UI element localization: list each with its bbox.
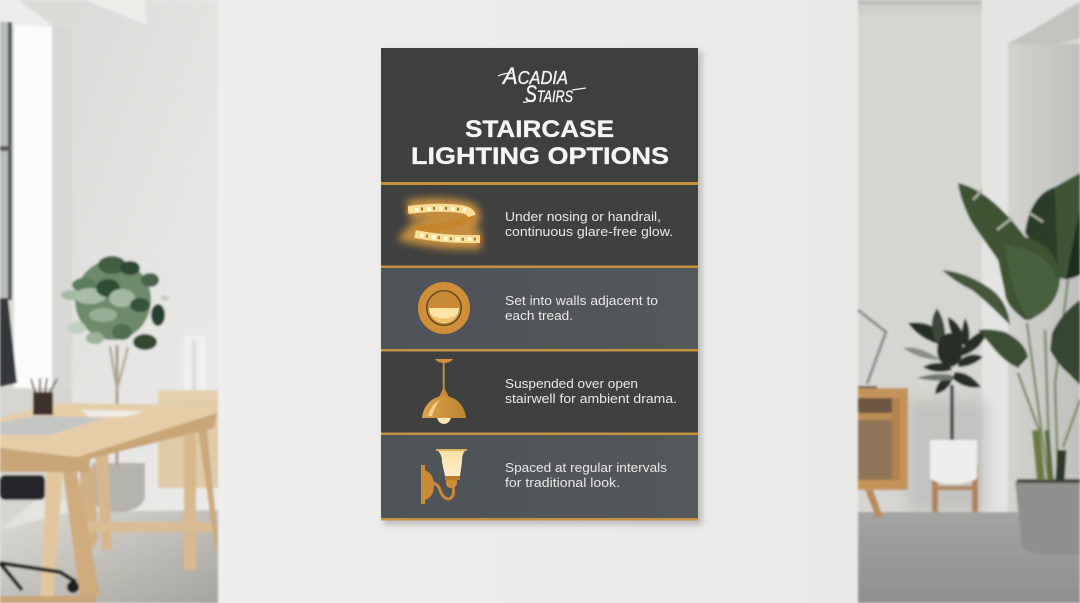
poster panel: [381, 48, 698, 520]
wooden cabinet: [858, 388, 908, 517]
title: LIGHTING OPTIONS: [411, 143, 669, 170]
left office background: [0, 0, 218, 603]
header: logo: STAIRS: [525, 81, 573, 108]
text: recessed description: Set into walls adjacent to: [505, 293, 658, 308]
row 1: LED strip: [381, 185, 698, 266]
table top: [0, 403, 217, 457]
text: sconce description: [505, 460, 668, 490]
monitor: [0, 298, 17, 387]
icon: recessed wall light: [418, 282, 470, 334]
wooden cabinet behind table: [158, 390, 218, 488]
title: STAIRCASE: [465, 116, 614, 143]
text: recessed description: [505, 293, 658, 323]
large plant leaves: [942, 173, 1080, 385]
text: pendant description: [505, 376, 677, 406]
header: logo: ACADIA: [501, 63, 568, 90]
row 3: pendant: [381, 351, 698, 433]
header: logo: [498, 63, 586, 108]
row 4: wall sconce: [381, 435, 698, 518]
left floor plant pot: [92, 463, 145, 512]
text: sconce description: for traditional look.: [505, 475, 620, 490]
text: strip description: [505, 209, 673, 239]
left plant trunk: [116, 345, 118, 465]
center wall: [218, 0, 858, 603]
icon: pendant lamp: [422, 359, 466, 424]
poster shadow: [384, 51, 702, 525]
left plant foliage: [61, 256, 169, 350]
text: pendant description: Suspended over open: [505, 376, 638, 391]
table legs: [95, 453, 112, 550]
row 2: recessed step light: [381, 268, 698, 349]
text: strip description: Under nosing or handrail,: [505, 209, 661, 224]
right office background: [858, 0, 1080, 603]
large plant stems: [1018, 280, 1080, 480]
title: [411, 116, 669, 170]
icon: wall sconce: [421, 449, 467, 504]
pencil cup: [33, 392, 53, 415]
shadow behind small plant and cabinet: [908, 400, 986, 512]
small plant with white pot: [903, 308, 988, 512]
large plant pot: [1015, 481, 1080, 555]
text: recessed description: each tread.: [505, 308, 573, 323]
desk lamp: [858, 310, 886, 384]
icon: LED strip light: [407, 206, 481, 243]
text: strip description: continuous glare-free glow.: [505, 224, 673, 239]
text: pendant description: stairwell for ambient drama.: [505, 391, 677, 406]
office chair: [0, 475, 45, 500]
text: sconce description: Spaced at regular intervals: [505, 460, 668, 475]
